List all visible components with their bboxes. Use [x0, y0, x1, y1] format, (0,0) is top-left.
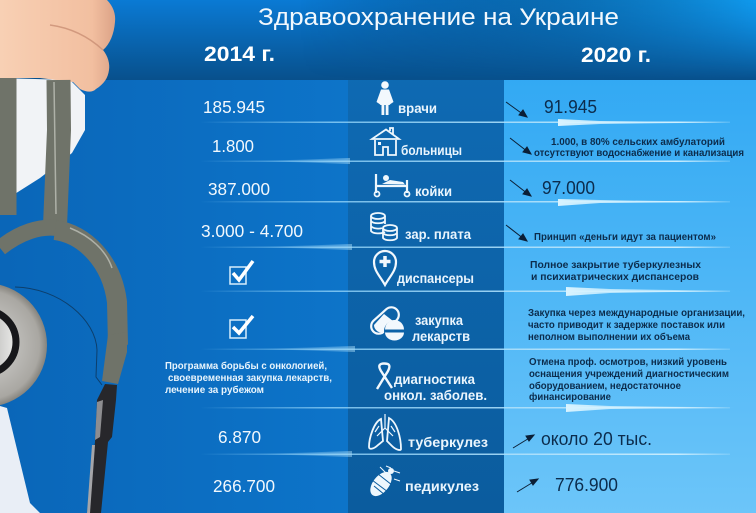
text: diagnostics 2020 — [529, 356, 729, 403]
label: oncology diagnostics: диагностика — [394, 372, 475, 387]
label: drug procurement — [412, 313, 470, 344]
chest piece — [0, 283, 47, 407]
2014 column values: 387.000 — [208, 179, 270, 199]
header band — [0, 0, 756, 80]
icon: lungs — [369, 414, 401, 450]
2020 column values: 776.900 — [555, 475, 618, 495]
arrows — [506, 102, 538, 492]
thin wire — [15, 287, 102, 385]
icon: woman doctor — [376, 81, 394, 115]
heading: 2014: 2014 г. — [204, 43, 275, 66]
label: hospitals: больницы — [401, 143, 462, 158]
background: right column — [504, 0, 756, 513]
2014 column values: 6.870 — [218, 427, 261, 447]
icon: coins — [371, 213, 397, 240]
text: oncology programme 2014: своевременная закупка лекарств, — [168, 373, 332, 384]
label: dispensaries: диспансеры — [397, 271, 474, 286]
text: procurement 2020: часто приводит к задержке поставок или — [528, 320, 725, 331]
text: diagnostics 2020: Отмена проф. осмотров, низкий уровень — [529, 356, 727, 368]
label: oncology diagnostics — [384, 372, 487, 403]
background: left column — [0, 0, 348, 513]
label: drug procurement: закупка — [415, 313, 463, 328]
icon: hospital house — [372, 128, 399, 155]
icon: checkbox 2 — [230, 316, 253, 338]
2014 column values: 185.945 — [203, 97, 265, 117]
text: hospitals 2020 — [534, 136, 744, 159]
text: hospitals 2020: отсутствуют водоснабжение и канализация — [534, 147, 744, 159]
icon: bed — [374, 174, 410, 196]
stethoscope tubes — [0, 78, 16, 215]
finger crease — [50, 25, 103, 50]
white coat — [0, 406, 40, 513]
2014 column values: 1.800 — [212, 136, 254, 156]
background: middle column — [348, 0, 504, 513]
text: procurement 2020 — [528, 308, 745, 343]
2020 column values: 91.945 — [544, 96, 597, 117]
text: oncology programme 2014: Программа борьбы с онкологией, — [165, 360, 327, 372]
label: tuberculosis: туберкулез — [408, 435, 488, 450]
photo: doctor's hand, sleeve and stethoscope — [0, 0, 127, 513]
2014 column values: 3.000 - 4.700 — [201, 221, 303, 241]
label: pediculosis: педикулез — [405, 479, 479, 494]
2020 column values: около 20 тыс. — [541, 429, 652, 449]
text: diagnostics 2020: оснащения учреждений диагностическим — [529, 369, 729, 380]
2014 column values — [201, 97, 303, 496]
text: dispensaries 2020: и психиатрических диспансеров — [531, 272, 699, 283]
heading: 2020: 2020 г. — [581, 44, 651, 67]
label: beds: койки — [415, 184, 452, 199]
hand — [0, 0, 115, 92]
text: oncology programme 2014 — [165, 360, 332, 396]
black tube and metal stem — [87, 384, 117, 513]
icon: louse — [366, 466, 400, 500]
text: procurement 2020: неполном выполнении их объема — [528, 331, 690, 343]
icon: map pin with cross — [374, 251, 396, 285]
2020 column values — [541, 96, 652, 495]
label: doctors: врачи — [398, 101, 437, 116]
label: oncology diagnostics: онкол. заболев. — [384, 388, 487, 403]
separator lines — [200, 119, 735, 457]
icon: checkbox 1 — [230, 261, 253, 284]
text: diagnostics 2020: финансирование — [529, 391, 611, 403]
title: Здравоохранение на Украине — [258, 4, 619, 31]
2014 column values: 266.700 — [213, 476, 275, 496]
icon: awareness ribbon — [377, 364, 392, 389]
text: salary 2020: Принцип «деньги идут за пациентом» — [534, 232, 716, 243]
text: dispensaries 2020: Полное закрытие туберкулезных — [530, 259, 701, 271]
text: oncology programme 2014: лечение за рубежом — [165, 384, 264, 396]
label: salary: зар. плата — [405, 227, 471, 242]
2020 column values: 97.000 — [542, 177, 595, 198]
text: dispensaries 2020 — [530, 259, 701, 283]
text: diagnostics 2020: оборудованием, недостаточное — [529, 380, 681, 392]
label: drug procurement: лекарств — [412, 329, 470, 344]
text: hospitals 2020: 1.000, в 80% сельских амбулаторий — [551, 136, 725, 148]
icon: pills — [368, 304, 405, 342]
white sleeve — [0, 78, 85, 198]
text: procurement 2020: Закупка через международные организации, — [528, 308, 745, 319]
